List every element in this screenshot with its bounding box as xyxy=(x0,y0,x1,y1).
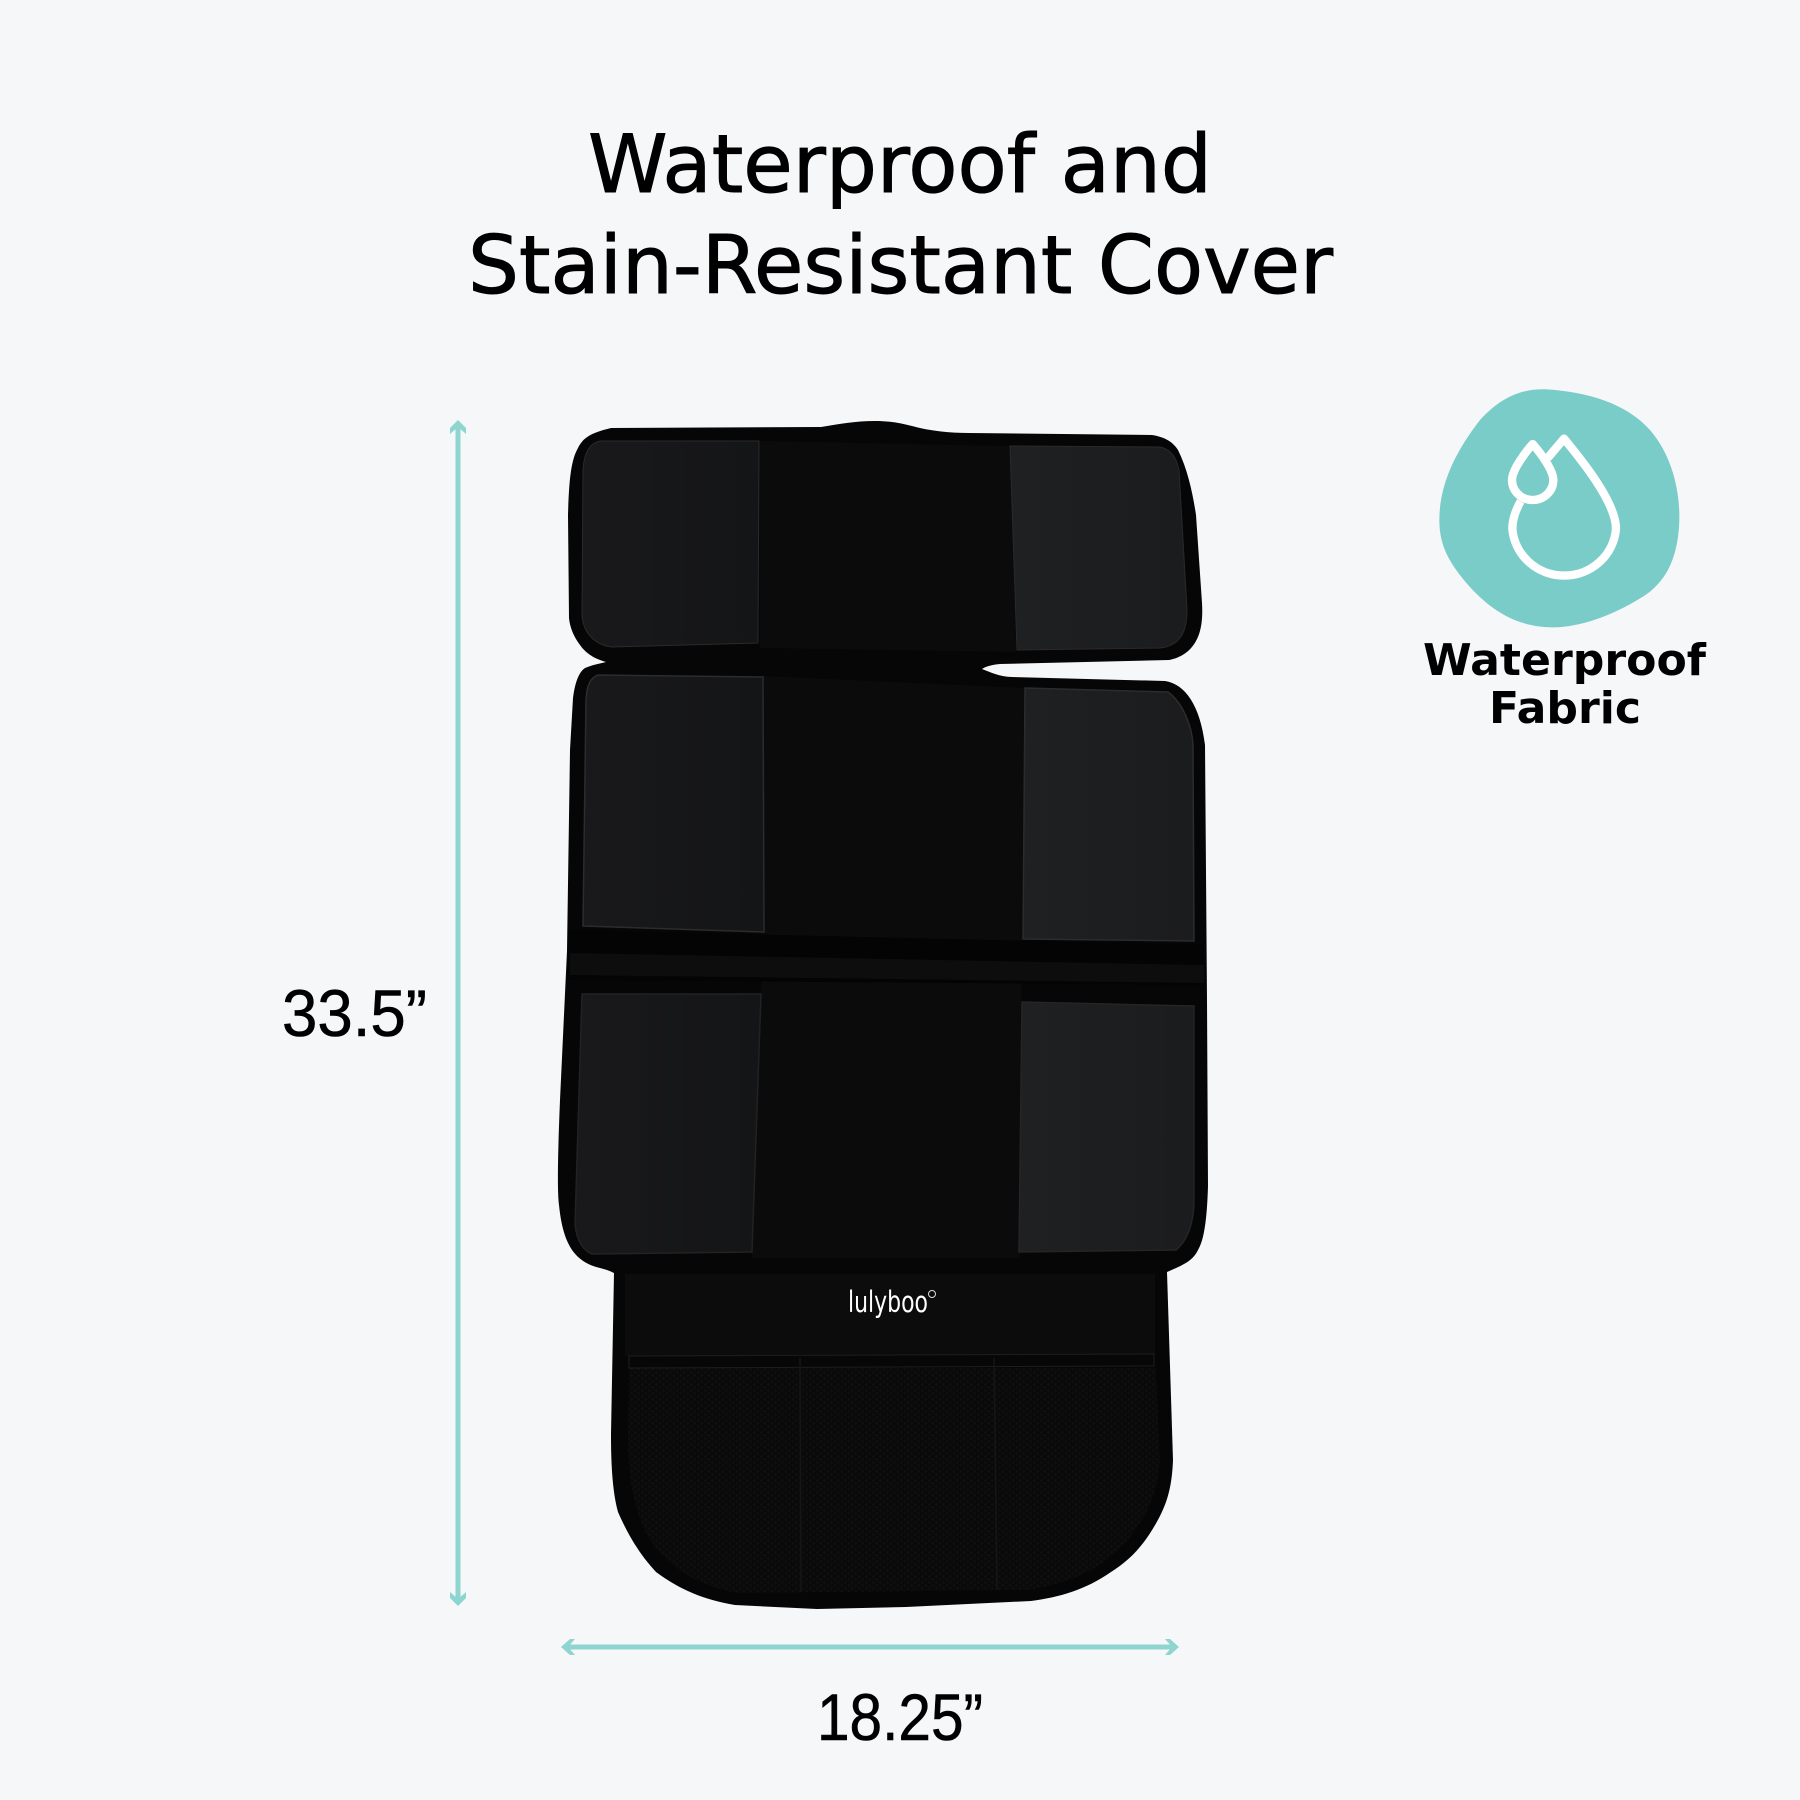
lower left panel xyxy=(575,994,761,1254)
title xyxy=(468,118,1333,312)
flap xyxy=(625,1274,1155,1356)
lower right panel xyxy=(1019,1002,1194,1252)
badge label xyxy=(1423,635,1707,734)
icon: water drops on teal blob xyxy=(1439,389,1679,627)
centre fabric xyxy=(752,441,1024,1258)
headrest left panel xyxy=(582,441,759,647)
height label: 33.5” xyxy=(282,976,427,1050)
width arrow xyxy=(561,1639,1179,1655)
brand logo: lulyboo xyxy=(848,1285,928,1319)
upper right panel xyxy=(1023,688,1194,941)
badge: waterproof fabric xyxy=(1423,389,1707,734)
height arrow xyxy=(450,420,466,1606)
title: Stain-Resistant Cover xyxy=(468,219,1333,312)
mat silhouette xyxy=(558,421,1208,1609)
headrest right panel xyxy=(1010,446,1187,650)
badge label: Waterproof xyxy=(1423,635,1707,686)
pocket dividers xyxy=(800,1358,997,1592)
upper left panel xyxy=(583,675,764,932)
width label: 18.25” xyxy=(817,1680,983,1754)
mesh pockets xyxy=(628,1368,1160,1593)
badge label: Fabric xyxy=(1489,683,1641,734)
title: Waterproof and xyxy=(588,118,1212,211)
fold band xyxy=(567,930,1204,985)
product: seat protector mat xyxy=(558,421,1208,1609)
pocket band xyxy=(629,1354,1154,1368)
